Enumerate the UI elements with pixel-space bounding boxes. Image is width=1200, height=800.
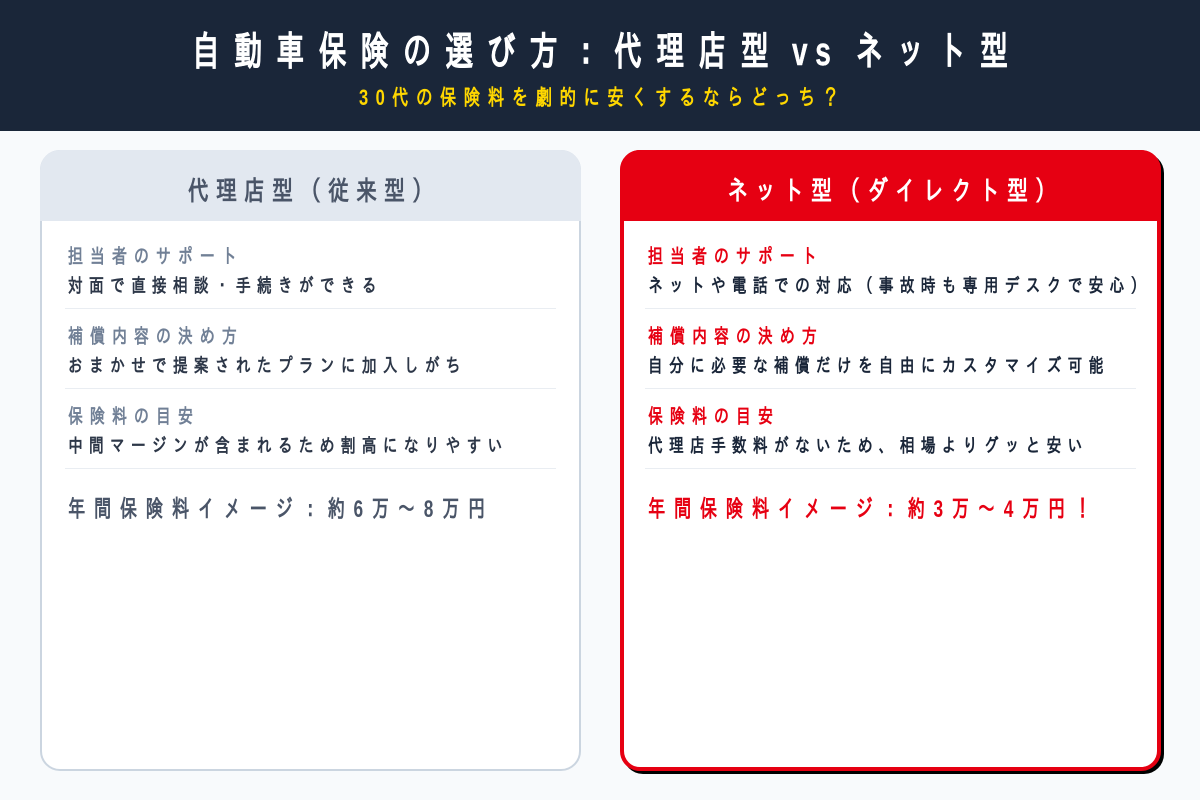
item: premium text: 代理店手数料がないため、相場よりグッと安い bbox=[648, 436, 1089, 457]
title: vs bbox=[792, 30, 839, 74]
item: support text: 対面で直接相談・手続きができる bbox=[68, 276, 383, 297]
item: premium label: 保険料の目安 bbox=[648, 406, 780, 428]
heading text: net: ネット型（ダイレクト型） bbox=[727, 176, 1063, 206]
item: support text: ネットや電話での対応（事故時も専用デスクで安心） bbox=[648, 276, 1152, 297]
item: premium label: 保険料の目安 bbox=[68, 406, 200, 428]
header band bbox=[0, 0, 1200, 131]
item: support label: 担当者のサポート bbox=[68, 246, 244, 268]
panel: agency type bbox=[40, 150, 581, 771]
title: 自動車保険の選び方：代理店型 bbox=[192, 30, 783, 74]
heading text: agency: 代理店型（従来型） bbox=[188, 176, 440, 206]
title: ネット型 bbox=[855, 30, 1022, 74]
item: coverage label: 補償内容の決め方 bbox=[648, 326, 824, 348]
annual premium: net: 年間保険料イメージ：約3万～4万円！ bbox=[648, 496, 1100, 523]
item: coverage text: おまかせで提案されたプランに加入しがち bbox=[68, 356, 467, 377]
annual premium: agency: 年間保険料イメージ：約6万～8万円 bbox=[68, 496, 494, 523]
item: premium text: 中間マージンが含まれるため割高になりやすい bbox=[68, 436, 509, 457]
panel heading: net bbox=[620, 150, 1161, 221]
panel heading: agency bbox=[40, 150, 581, 221]
subtitle: 30代の保険料を劇的に安くするならどっち？ bbox=[359, 85, 846, 110]
item: coverage text: 自分に必要な補償だけを自由にカスタマイズ可能 bbox=[648, 356, 1110, 377]
item: support label: 担当者のサポート bbox=[648, 246, 824, 268]
panel: net type bbox=[620, 150, 1161, 771]
item: coverage label: 補償内容の決め方 bbox=[68, 326, 244, 348]
